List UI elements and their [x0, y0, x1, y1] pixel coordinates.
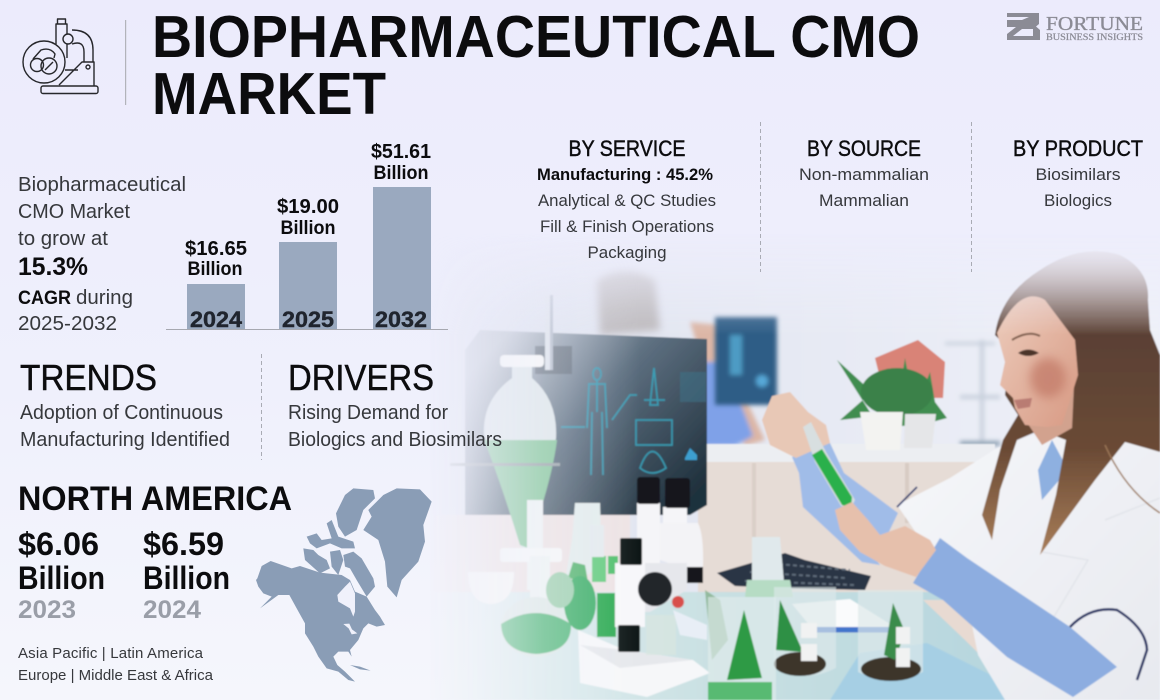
- stat: 2024 value: [143, 526, 230, 624]
- panel: by product: Biologics: [1044, 191, 1112, 210]
- test flasks with green liquid: [486, 499, 619, 655]
- Great Lakes: [343, 624, 357, 634]
- panel: trends: Manufacturing Identified: [20, 429, 230, 451]
- bar 2025: 2025: [282, 307, 334, 332]
- growth text block: 2025-2032: [18, 313, 117, 335]
- bar 2024: Billion: [188, 259, 242, 280]
- bar 2032: $51.61: [371, 141, 431, 163]
- background screen: [715, 317, 777, 405]
- coat pocket lines: [1087, 512, 1124, 561]
- stat: 2023 value: $6.06: [18, 526, 99, 562]
- panel: by product: [1013, 136, 1143, 210]
- Hudson Bay: [337, 582, 355, 617]
- panel: trends: TRENDS: [20, 357, 157, 398]
- bar 2032: Billion: [374, 163, 428, 184]
- loose hair strand: [1105, 445, 1160, 513]
- bar 2025: [277, 196, 339, 332]
- logo mark: [1007, 13, 1040, 40]
- lab coat: [897, 425, 1160, 700]
- panel: by product: Biosimilars: [1036, 165, 1120, 184]
- other regions list: Asia Pacific | Latin America: [18, 645, 204, 662]
- near arm sleeve: [913, 538, 1117, 697]
- stat: 2024 value: $6.59: [143, 526, 224, 562]
- separatory funnel with green liquid: [450, 355, 560, 555]
- potted plant: [837, 340, 947, 450]
- coat piping: [897, 487, 917, 507]
- test tube: [803, 422, 855, 508]
- hair: [982, 251, 1160, 555]
- background colleague head: [597, 271, 660, 335]
- desk reflection: [830, 643, 1007, 700]
- Greenland: [363, 488, 432, 597]
- panel: by service: BY SERVICE: [568, 136, 686, 161]
- growth text block: CAGR: [18, 288, 71, 309]
- Caribbean islands: [350, 665, 371, 671]
- logo name: FORTUNE: [1046, 13, 1143, 35]
- panel: drivers: [288, 357, 502, 451]
- growth text block: CMO Market: [18, 201, 130, 223]
- other regions list: [18, 645, 214, 684]
- logo tagline: BUSINESS INSIGHTS: [1046, 32, 1143, 43]
- eye: [1018, 350, 1039, 356]
- blue collar: [1037, 440, 1064, 500]
- wall shelf frame: [945, 340, 1000, 450]
- other regions list: Europe | Middle East & Africa: [18, 667, 214, 684]
- counter and cabinets: [522, 443, 996, 592]
- stat: 2024 value: 2024: [143, 596, 201, 624]
- plant beakers: [705, 537, 923, 700]
- panel: by source: BY SOURCE: [807, 136, 921, 161]
- mouth: [1014, 398, 1032, 409]
- panel: by service: Packaging: [588, 243, 666, 262]
- mainland: [256, 561, 385, 682]
- microscope: [578, 477, 710, 697]
- bar chart: [166, 141, 448, 332]
- bar 2025: $19.00: [277, 196, 339, 218]
- panel: trends: Adoption of Continuous: [20, 402, 223, 424]
- face: [997, 296, 1078, 427]
- scientist: [762, 251, 1160, 700]
- notebook on desk: [792, 599, 891, 632]
- eyebrow: [1012, 334, 1040, 340]
- background colleague body: [690, 322, 765, 446]
- stat: 2023 value: [18, 526, 105, 624]
- Baffin Island: [336, 488, 375, 537]
- panel: North America heading: NORTH AMERICA: [18, 480, 292, 518]
- divider beside title: [125, 20, 126, 105]
- growth text block: Biopharmaceutical: [18, 174, 186, 196]
- logo: Fortune Business Insights: [1007, 13, 1143, 43]
- stat: 2024 value: Billion: [143, 560, 230, 596]
- panel: trends: [20, 357, 230, 451]
- panel: by service: Analytical & QC Studies: [538, 191, 716, 210]
- stat: 2023 value: 2023: [18, 596, 76, 624]
- Arctic islands: [303, 520, 375, 597]
- upper hand: [762, 392, 830, 458]
- panel: drivers: DRIVERS: [288, 357, 434, 398]
- beige cabinet wedge: [923, 599, 978, 652]
- bar 2024: [185, 238, 247, 332]
- keyboard: [717, 553, 871, 590]
- growth text block: [18, 174, 186, 335]
- bar 2032: 2032: [375, 307, 427, 332]
- panel: by product: BY PRODUCT: [1013, 136, 1143, 161]
- panel: by service: [537, 136, 716, 262]
- growth text block: 15.3%: [18, 253, 88, 281]
- growth text block: to grow at: [18, 228, 108, 250]
- bar 2032: [371, 141, 431, 332]
- panel: by source: Non-mammalian: [799, 165, 929, 184]
- bar 2024: $16.65: [185, 238, 247, 260]
- short sleeve edge: [1070, 609, 1147, 680]
- large monitor: [465, 295, 707, 515]
- panel: by source: [799, 136, 929, 210]
- panel: by source: Mammalian: [819, 191, 909, 210]
- cheek: [1030, 358, 1066, 398]
- lab back wall: [513, 294, 1160, 592]
- chart baseline: [166, 329, 448, 330]
- panel: drivers: Biologics and Biosimilars: [288, 429, 502, 451]
- map: North America: [256, 488, 432, 682]
- bar 2024: 2024: [190, 307, 243, 332]
- far arm sleeve: [792, 443, 898, 565]
- icon: microscope with pills: [23, 19, 98, 94]
- title: [152, 4, 920, 127]
- panel: by service: Fill & Finish Operations: [540, 217, 714, 236]
- title: BIOPHARMACEUTICAL CMO: [152, 4, 920, 70]
- desk surface: [486, 591, 990, 700]
- bar 2025: Billion: [280, 218, 336, 239]
- growth text block: during: [76, 287, 133, 309]
- neck: [1028, 388, 1075, 446]
- photo: scientist in laboratory: [430, 230, 1160, 700]
- panel: drivers: Rising Demand for: [288, 402, 448, 424]
- panel: by service: Manufacturing : 45.2%: [537, 166, 713, 184]
- title: MARKET: [152, 61, 386, 127]
- lower hand: [835, 502, 936, 577]
- stat: 2023 value: Billion: [18, 560, 105, 596]
